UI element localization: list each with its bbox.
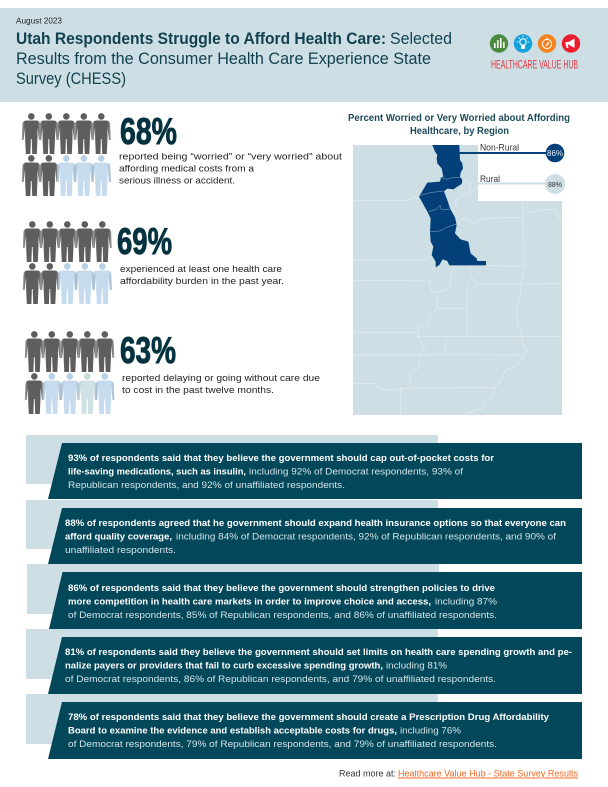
- panel: prescription drug affordability board: 78% of respondents said that they believe the government should create a Prescription Drug Affordability: [68, 712, 550, 723]
- big number: 69%: [117, 221, 172, 262]
- logo: Healthcare Value Hub: [490, 34, 580, 72]
- big number: 63%: [120, 330, 176, 371]
- panel: limit spending growth: [26, 629, 582, 694]
- description: reported being “worried” or “very worried” about: [119, 152, 342, 162]
- title: Survey (CHESS): [16, 69, 126, 88]
- panel: cap out-of-pocket costs: 93% of respondents said that they believe the government should cap out-of-pocket costs for: [68, 453, 494, 464]
- panel: prescription drug affordability board: of Democrat respondents, 79% of Republican respondents, and 79% of unaffiliated respondents.: [68, 739, 497, 750]
- stat block: 63%: [25, 330, 320, 414]
- panel: expand insurance options: unaffiliated respondents.: [65, 545, 176, 556]
- icon: megaphone: [562, 34, 580, 53]
- stat block: 69%: [23, 221, 284, 304]
- icon: compass: [538, 34, 556, 53]
- description: [119, 152, 342, 186]
- map of Utah regions: [353, 145, 562, 415]
- non-rural region: [419, 145, 486, 267]
- county borders: [353, 180, 562, 266]
- header band: [0, 8, 608, 102]
- title: Utah Respondents Struggle to Afford Health Care:: [16, 29, 386, 48]
- state base: [353, 145, 562, 415]
- title: Results from the Consumer Health Care Experience State: [16, 49, 431, 68]
- legend: rural: [478, 174, 565, 194]
- title: Selected: [390, 29, 452, 48]
- panel: cap out-of-pocket costs: including 92% of Democrat respondents, 93% of: [249, 466, 463, 478]
- description: affordability burden in the past year.: [120, 276, 284, 287]
- title: [16, 29, 452, 88]
- description: reported delaying or going without care due: [122, 373, 320, 384]
- panel: cap out-of-pocket costs: [26, 435, 582, 499]
- stat block: 68%: [22, 111, 342, 196]
- panel: cap out-of-pocket costs: life-saving medications, such as insulin,: [68, 466, 246, 478]
- icon: chart: [490, 34, 508, 53]
- legend: non-rural: [459, 142, 564, 162]
- description: experienced at least one health care: [120, 264, 282, 275]
- panel: cap out-of-pocket costs: Republican respondents, and 92% of unaffiliated respondents.: [68, 480, 345, 491]
- footer link: Healthcare Value Hub - State Survey Results: [398, 768, 578, 780]
- panel: strengthen competition policies: [27, 564, 582, 629]
- panel: strengthen competition policies: more competition in health care markets in order to improve choice and access,: [68, 596, 431, 608]
- panel: limit spending growth: including 81%: [386, 660, 447, 672]
- panel: prescription drug affordability board: including 76%: [400, 726, 461, 736]
- panel: strengthen competition policies: including 87%: [435, 596, 497, 608]
- legend: rural: Rural: [480, 174, 500, 185]
- map heading: [348, 113, 570, 137]
- date: August 2023: [16, 16, 63, 26]
- legend: rural: 88%: [548, 180, 562, 189]
- pictogram: 63 percent: [25, 331, 114, 414]
- panel: limit spending growth: 81% of respondents said they believe the government should set limits on health care spending growth and pe-: [65, 647, 572, 658]
- map heading: Percent Worried or Very Worried about Affording: [348, 113, 570, 124]
- legend: non-rural: 86%: [547, 149, 563, 158]
- panel: expand insurance options: [26, 500, 582, 564]
- icon: light bulb: [514, 34, 532, 53]
- description: affording medical costs from a: [119, 164, 255, 174]
- pictogram: 68 percent: [22, 113, 111, 196]
- map heading: Healthcare, by Region: [410, 126, 509, 137]
- panel: strengthen competition policies: 86% of respondents said that they believe the government should strengthen policies to drive: [68, 583, 495, 594]
- panel: prescription drug affordability board: [26, 694, 582, 759]
- legend: non-rural: Non-Rural: [480, 142, 519, 154]
- panel: limit spending growth: nalize payers or providers that fail to curb excessive spending growth,: [65, 660, 383, 672]
- description: [120, 264, 284, 287]
- panel: expand insurance options: including 84% of Democrat respondents, 92% of Republican respondents, and 90% of: [176, 532, 556, 542]
- pictogram: 69 percent: [23, 221, 112, 304]
- big number: 68%: [120, 111, 177, 152]
- description: [122, 373, 320, 396]
- description: serious illness or accident.: [119, 176, 235, 186]
- footer link: Read more at:: [339, 768, 396, 780]
- panel: expand insurance options: 88% of respondents agreed that he government should expand health insurance options so that everyone can: [65, 518, 566, 529]
- panel: prescription drug affordability board: Board to examine the evidence and establish acceptable costs for drugs,: [68, 726, 397, 736]
- description: to cost in the past twelve months.: [122, 385, 274, 396]
- panel: strengthen competition policies: of Democrat respondents, 85% of Republican respondents, and 86% of unaffiliated respondents.: [68, 610, 497, 621]
- panel: expand insurance options: afford quality coverage,: [65, 532, 172, 542]
- panel: limit spending growth: of Democrat respondents, 86% of Republican respondents, and 79% of unaffiliated respondents.: [65, 674, 496, 685]
